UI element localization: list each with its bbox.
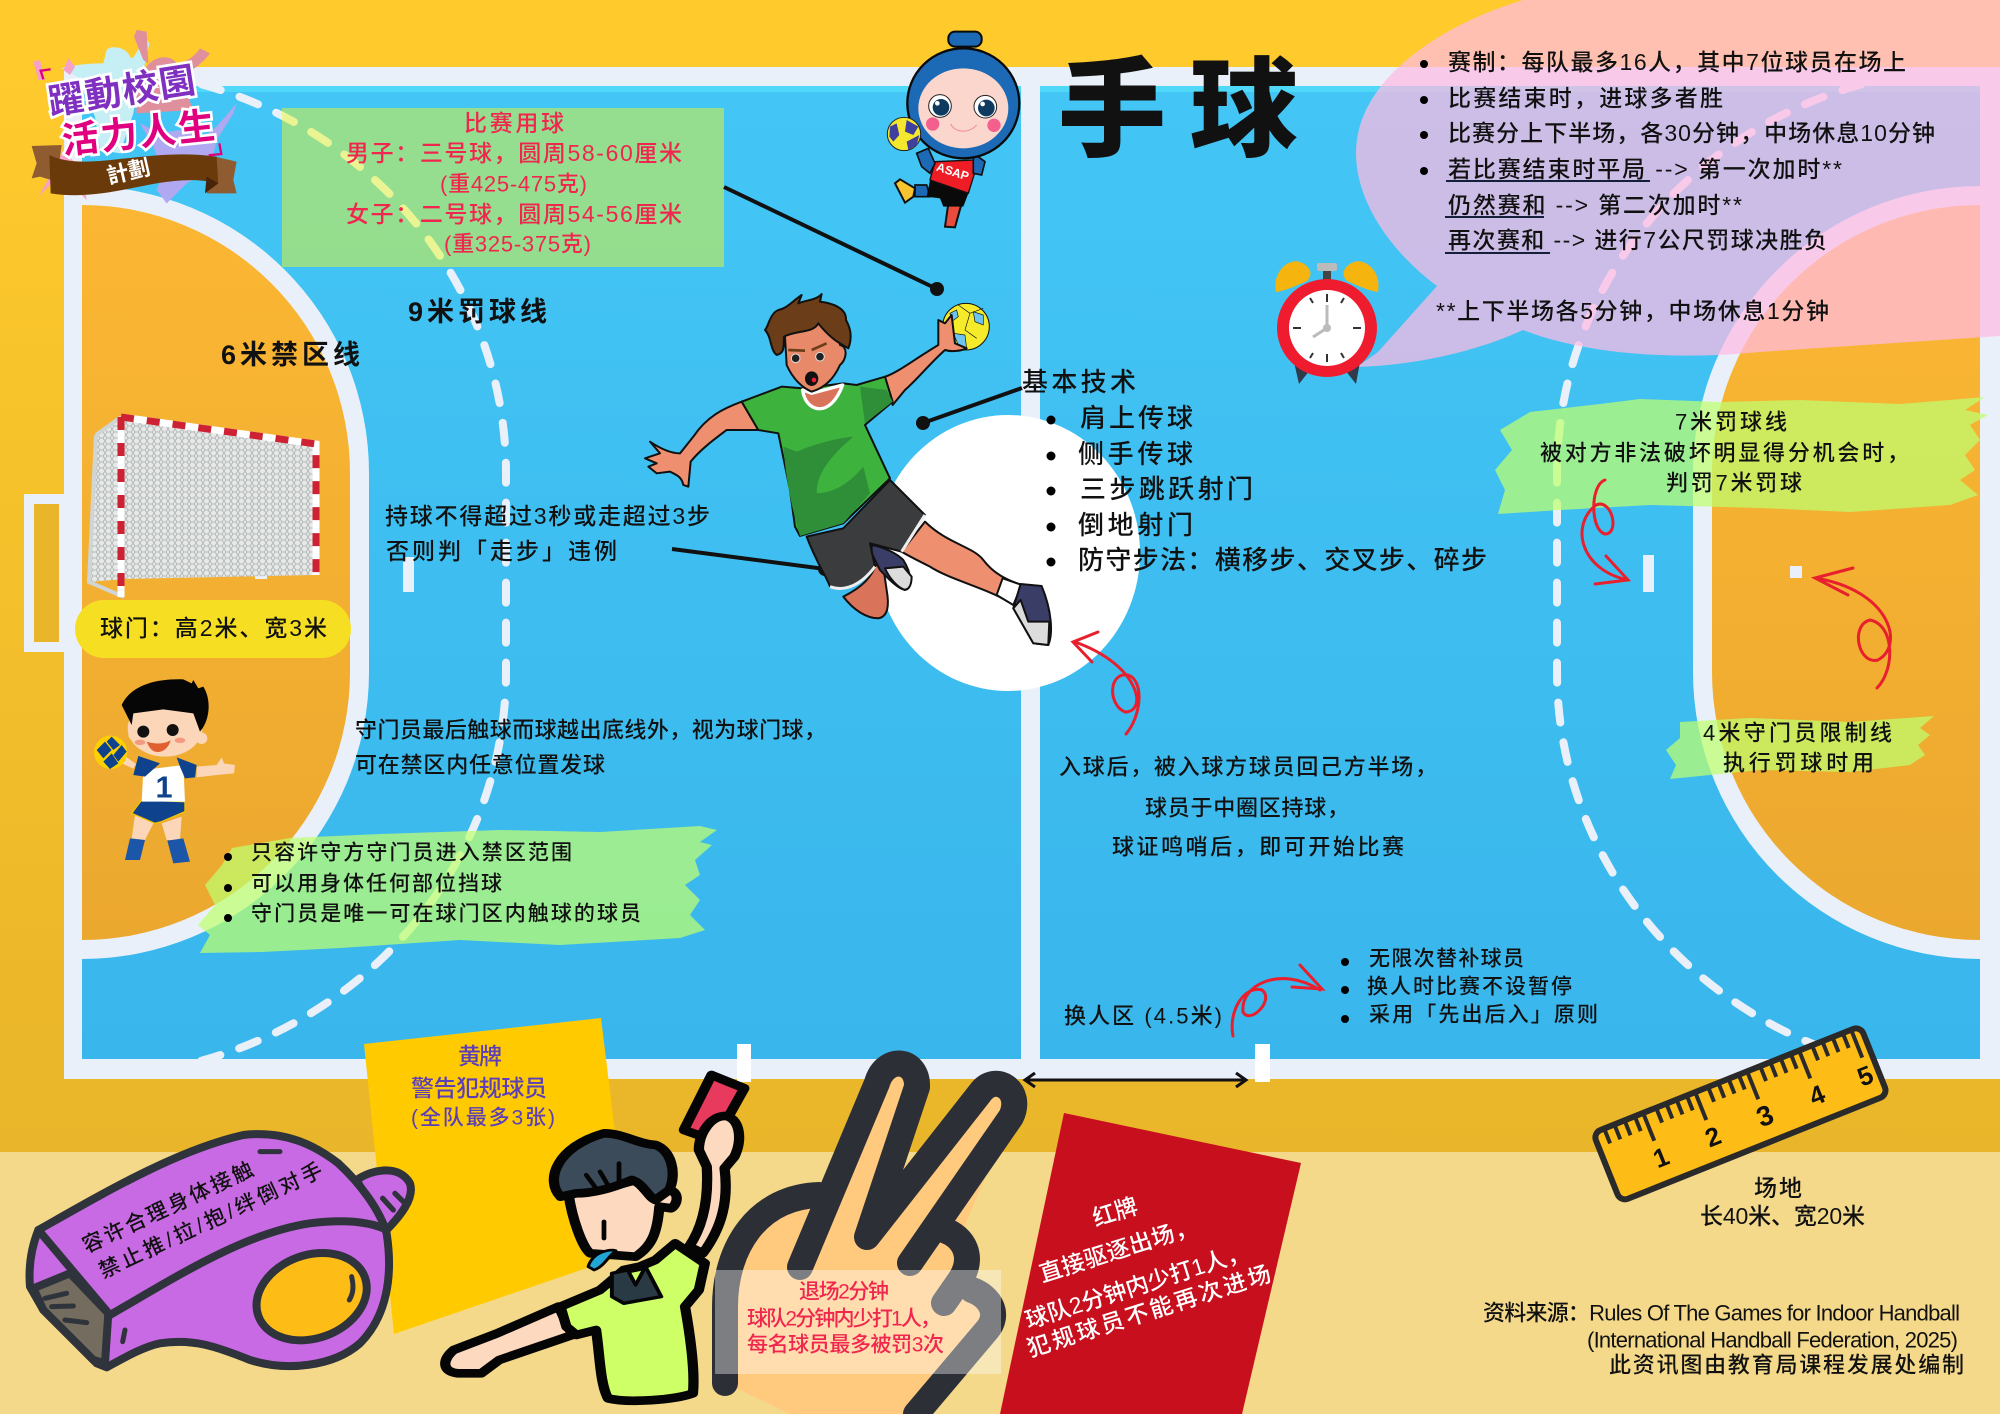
text: source	[1483, 1300, 1964, 1378]
list: basic skills: 侧手传球	[1078, 439, 1193, 469]
icon: ruler: 3	[1752, 1099, 1778, 1133]
brush panel: 7m penalty: 7米罚球线	[1675, 410, 1787, 434]
logo wording: 躍動校園	[45, 59, 198, 123]
panel: two-minute suspension: 球队2分钟内少打1人，	[747, 1308, 941, 1330]
goalkeeper rule list	[224, 842, 641, 926]
arrow: 4.5m substitution span	[1025, 1073, 1246, 1087]
raised arm	[689, 1116, 739, 1253]
arrow: to substitution list	[1232, 965, 1322, 1036]
centre circle	[876, 415, 1140, 691]
red card: 直接驱逐出场，	[1036, 1213, 1200, 1287]
icon: mascot with ball: ASAP	[935, 160, 971, 183]
text: substitution zone: 无限次替补球员	[1369, 948, 1524, 970]
neck and collar	[803, 385, 843, 409]
bent leg	[843, 563, 888, 618]
jersey	[742, 377, 893, 536]
background: sand floor	[0, 1152, 2000, 1414]
pill: goal size	[75, 600, 351, 658]
panel: match ball specs	[282, 108, 724, 267]
line labels: 9m and 6m	[221, 297, 547, 370]
panel: two-minute suspension: 退场2分钟	[799, 1280, 889, 1304]
brush panel: goalkeeper rules	[198, 826, 717, 953]
line labels: 9m and 6m: 6米禁区线	[221, 340, 360, 370]
list: basic skills: 三步跳跃射门	[1080, 474, 1253, 504]
brush panel: 4m line: 执行罚球时用	[1723, 750, 1874, 776]
red card	[1000, 1113, 1301, 1414]
panel: match ball specs: (重425-475克)	[440, 172, 587, 196]
connector lines with dots	[672, 187, 1022, 576]
icon: ruler: 5	[1853, 1059, 1878, 1092]
text: goalkeeper throw	[355, 718, 826, 778]
left 6m zone	[82, 186, 369, 959]
goalkeeper rule list: 守门员是唯一可在球门区内触球的球员	[251, 902, 641, 926]
pointing arm	[445, 1307, 572, 1373]
icon: ruler: 2	[1701, 1120, 1725, 1153]
logo ribbon: 計劃	[104, 155, 153, 189]
text: three second rule	[385, 503, 710, 564]
rule list: 仍然赛和 --> 第二次加时**	[1448, 192, 1742, 218]
arrow: to 4m mark	[1815, 568, 1890, 688]
text: goalkeeper throw: 守门员最后触球而球越出底线外，视为球门球，	[355, 718, 826, 742]
icon: boy with ball: 1	[155, 770, 173, 804]
brush panel: 7m penalty: 被对方非法破坏明显得分机会时，	[1540, 440, 1909, 466]
list: basic skills	[1022, 367, 1487, 575]
yellow card: 警告犯规球员	[411, 1075, 547, 1101]
text: substitution zone	[1064, 948, 1598, 1028]
rule list: 比赛分上下半场，各30分钟，中场休息10分钟	[1448, 120, 1935, 146]
text: court size	[1700, 1175, 1865, 1229]
tie	[612, 1267, 661, 1303]
red curly arrows	[1073, 480, 1890, 1036]
logo wording	[41, 59, 221, 162]
logo: 躍動校園 活力人生 計劃	[32, 30, 237, 203]
list: basic skills: 肩上传球	[1080, 403, 1193, 433]
rule list: 赛制：每队最多16人，其中7位球员在场上	[1448, 49, 1906, 75]
list: basic skills: 基本技术	[1022, 367, 1136, 397]
text: restart after goal	[1059, 754, 1437, 860]
whistle in mouth	[588, 1250, 616, 1270]
icon: boy with ball	[94, 679, 235, 863]
logo wording: 活力人生	[60, 105, 217, 162]
substitution marks	[737, 1044, 1270, 1082]
raised arm	[885, 315, 967, 405]
whistle text: 禁止推/拉/抱/绊倒对手	[96, 1159, 326, 1283]
shorts	[807, 480, 925, 588]
text: substitution zone: 换人时比赛不设暂停	[1367, 976, 1572, 998]
face	[568, 1180, 677, 1257]
panel: two-minute suspension: 每名球员最多被罚3次	[747, 1334, 944, 1356]
text: three second rule: 否则判「走步」违例	[386, 538, 617, 564]
goalkeeper rule list: 只容许守方守门员进入禁区范围	[251, 842, 572, 864]
panel: match ball specs: (重325-375克)	[444, 232, 591, 256]
rule list	[1420, 49, 1935, 324]
shirt	[560, 1243, 705, 1401]
red card: 红牌	[1089, 1193, 1141, 1231]
red card: 犯规球员不能再次进场	[1024, 1260, 1274, 1362]
sock	[997, 578, 1022, 605]
icon: ruler	[1593, 1026, 1888, 1202]
text: source: (International Handball Federation, 2025)	[1587, 1328, 1958, 1352]
9m dashed lines	[198, 86, 1865, 1059]
icon: mascot with ball	[887, 32, 1019, 227]
icon: handball player	[645, 294, 1051, 645]
list: basic skills: 倒地射门	[1078, 510, 1193, 540]
title: 手球	[1058, 50, 1298, 170]
brush panel: 4m line	[1666, 716, 1934, 779]
7m and 4m marks	[255, 555, 1802, 592]
text: restart after goal: 球证鸣哨后，即可开始比赛	[1112, 834, 1404, 860]
ball	[943, 303, 989, 350]
right 6m zone	[1693, 186, 1980, 959]
panel: handball court	[29, 67, 2000, 1082]
text: restart after goal: 入球后，被入球方球员回己方半场，	[1059, 754, 1437, 780]
pill: goal size: 球门：高2米、宽3米	[100, 615, 327, 641]
rule list: 若比赛结束时平局 --> 第一次加时**	[1448, 156, 1842, 182]
brush panel: 4m line: 4米守门员限制线	[1703, 720, 1892, 746]
text: restart after goal: 球员于中圈区持球，	[1145, 796, 1349, 820]
icon: alarm clock	[1275, 261, 1379, 384]
yellow card: 黄牌	[458, 1043, 502, 1069]
arrow: to 7m line	[1582, 480, 1628, 584]
text: source: 资料来源：Rules Of The Games for Indoor Handball	[1483, 1300, 1960, 1326]
red card in hand	[684, 1075, 744, 1137]
rule list: **上下半场各5分钟，中场休息1分钟	[1436, 298, 1829, 324]
goalkeeper rule list: 可以用身体任何部位挡球	[251, 872, 502, 896]
icon: goal	[89, 417, 316, 597]
text: court size: 长40米、宽20米	[1700, 1203, 1865, 1229]
brush panel: 7m penalty: 判罚7米罚球	[1666, 470, 1802, 496]
logo ribbon	[32, 145, 237, 195]
text: goalkeeper throw: 可在禁区内任意位置发球	[355, 752, 605, 778]
front shoe	[1013, 584, 1051, 645]
text: court size: 场地	[1754, 1175, 1802, 1201]
panel: match ball specs: 比赛用球	[464, 110, 564, 136]
icon: ruler: 1	[1649, 1141, 1673, 1174]
icon: ruler: 4	[1805, 1078, 1830, 1112]
icon: referee	[445, 1075, 744, 1401]
line labels: 9m and 6m: 9米罚球线	[408, 297, 547, 327]
text: substitution zone: 换人区 (4.5米)	[1064, 1004, 1222, 1028]
front leg	[902, 522, 1022, 605]
arrow: to centre circle	[1073, 632, 1139, 734]
icon: two-finger hand	[725, 1064, 1014, 1414]
rule list: 比赛结束时，进球多者胜	[1448, 85, 1723, 111]
whistle text: 容许合理身体接触	[79, 1158, 257, 1258]
text: substitution zone: 采用「先出后入」原则	[1369, 1004, 1598, 1026]
panel: two-minute suspension	[715, 1270, 1001, 1374]
text: three second rule: 持球不得超过3秒或走超过3步	[385, 503, 710, 529]
hair	[554, 1133, 673, 1200]
logo silhouettes	[33, 30, 237, 203]
back shoe	[872, 545, 910, 590]
speech bubble: match rules	[1356, 0, 2000, 367]
brush panel: 7m penalty	[1495, 397, 1988, 514]
left arm	[645, 402, 758, 487]
left goal crease box	[29, 499, 64, 647]
list: basic skills: 防守步法：横移步、交叉步、碎步	[1078, 545, 1487, 575]
icon: whistle	[30, 1134, 411, 1367]
head	[784, 317, 846, 392]
panel: match ball specs: 女子：二号球，圆周54-56厘米	[346, 201, 682, 227]
panel: match ball specs: 男子：三号球，圆周58-60厘米	[346, 140, 682, 166]
rule list: 再次赛和 --> 进行7公尺罚球决胜负	[1448, 227, 1827, 253]
red card: 球队2分钟内少打1人，	[1022, 1239, 1252, 1333]
yellow card: (全队最多3张)	[411, 1106, 555, 1130]
text: source: 此资讯图由教育局课程发展处编制	[1609, 1352, 1964, 1378]
yellow card	[364, 1018, 625, 1334]
